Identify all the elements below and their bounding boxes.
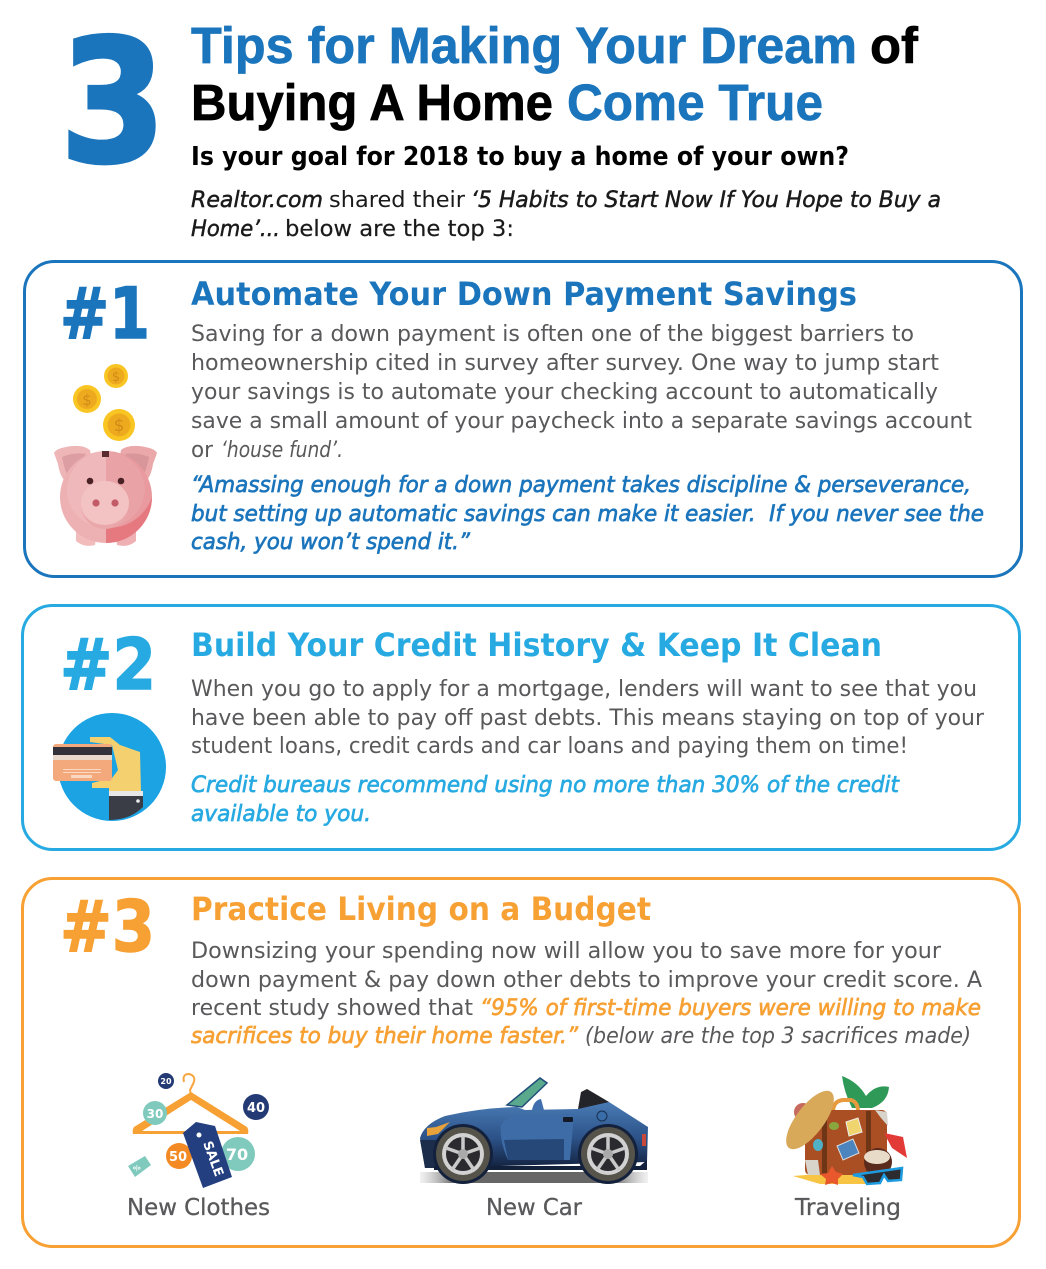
title — [191, 17, 919, 131]
title: Buying A Home — [191, 74, 553, 131]
tip 1 body text: ‘house fund’. — [221, 437, 343, 463]
title: of — [870, 17, 919, 74]
tip 2 quote: available to you. — [191, 801, 371, 827]
tip 2 body text: student loans, credit cards and car loans and paying them on time! — [191, 733, 908, 759]
tip 1 body text: or — [191, 437, 214, 463]
icon: piggy bank with coins: $ — [112, 370, 120, 385]
icon: hanger with sale tags: % — [132, 1163, 142, 1174]
subtitle: Is your goal for 2018 to buy a home of your own? — [191, 142, 849, 172]
icon: blue convertible car — [420, 1078, 648, 1184]
tip 3 body text — [191, 938, 983, 1049]
icon: hanger with sale tags: 30 — [147, 1107, 163, 1121]
tip 2 number: #2 — [60, 624, 156, 706]
icon: hanger with sale tags: SALE — [199, 1139, 226, 1179]
tip 1 body text: save a small amount of your paycheck into a separate savings account — [191, 408, 972, 434]
panel: tip 2 — [22, 606, 1020, 850]
tip 2 quote — [191, 772, 900, 827]
intro text: ‘5 Habits to Start Now If You Hope to Buy a — [471, 187, 941, 213]
tip 3 body text: (below are the top 3 sacrifices made) — [585, 1023, 971, 1049]
tip 1 heading: Automate Your Down Payment Savings — [191, 275, 857, 313]
tip 1 body text: your savings is to automate your checking account to automatically — [191, 379, 938, 405]
tip 1 body text — [191, 321, 972, 463]
tip 3 heading: Practice Living on a Budget — [191, 890, 651, 928]
panel: tip 1 — [24, 262, 1022, 576]
intro text: Realtor.com — [191, 187, 323, 213]
tip 2 body text: When you go to apply for a mortgage, lenders will want to see that you — [191, 676, 977, 702]
tip 2 quote: Credit bureaus recommend using no more than 30% of the credit — [191, 772, 900, 798]
icon: hanger with sale tags: 70 — [226, 1145, 248, 1164]
panel: tip 3 — [22, 878, 1020, 1246]
icon: piggy bank with coins: $ — [82, 391, 92, 409]
tip 3 body text: Downsizing your spending now will allow you to save more for your — [191, 938, 942, 964]
label: new clothes: New Clothes — [127, 1195, 270, 1221]
big number 3: 3 — [60, 4, 166, 202]
icon: hanger with sale tags: 20 — [160, 1077, 172, 1086]
icon: hanger with sale tags: 50 — [169, 1150, 187, 1165]
tip 3 body text: “95% of first-time buyers were willing to make — [480, 995, 981, 1021]
tip 1 body text: homeownership cited in survey after survey. One way to jump start — [191, 350, 939, 376]
icon: hanger with sale tags: 40 — [247, 1101, 265, 1116]
tip 2 body text: have been able to pay off past debts. This means staying on top of your — [191, 705, 985, 731]
intro text: shared their — [329, 187, 466, 213]
tip 1 quote: “Amassing enough for a down payment takes discipline & perseverance, — [191, 472, 971, 498]
icon: hanger with sale tags — [128, 1073, 269, 1188]
tip 2 body text — [191, 676, 985, 759]
tip 1 quote: cash, you won’t spend it.” — [191, 529, 470, 555]
tip 3 number: #3 — [60, 886, 155, 968]
label: new car: New Car — [486, 1195, 583, 1221]
title: Tips for Making Your Dream — [191, 17, 857, 74]
title: Come True — [567, 74, 823, 131]
intro text: below are the top 3: — [285, 216, 514, 242]
tip 1 quote: but setting up automatic savings can make it easier. If you never see the — [191, 501, 984, 527]
tip 1 number: #1 — [60, 273, 150, 355]
tip 3 body text: sacrifices to buy their home faster.” — [191, 1023, 578, 1049]
tip 1 body text: Saving for a down payment is often one of the biggest barriers to — [191, 321, 914, 347]
tip 2 heading: Build Your Credit History & Keep It Clean — [191, 626, 882, 664]
intro text: Home’... — [191, 216, 280, 242]
tip 1 quote — [191, 472, 984, 555]
icon: suitcase with beach items — [778, 1076, 907, 1185]
icon: piggy bank with coins — [54, 364, 157, 546]
label: traveling: Traveling — [794, 1195, 901, 1221]
icon: piggy bank with coins: $ — [114, 416, 124, 436]
intro text — [191, 187, 941, 242]
tip 3 body text: down payment & pay down other debts to improve your credit score. A — [191, 967, 983, 993]
icon: hand holding credit card — [53, 713, 166, 821]
tip 3 body text: recent study showed that — [191, 995, 473, 1021]
